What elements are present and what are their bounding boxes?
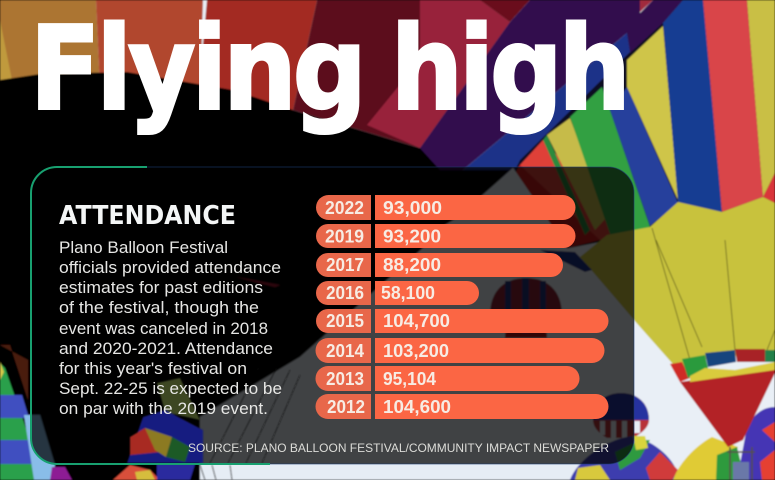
text block: description: officials provided attendance — [59, 259, 281, 277]
bar 2016 — [316, 281, 479, 305]
bar 2019: 93,200 — [383, 226, 441, 246]
text block: description: on par with the 2019 event. — [59, 400, 268, 418]
text block: description: event was canceled in 2018 — [59, 320, 268, 338]
bar 2016: 58,100 — [381, 283, 435, 303]
text block: description: Plano Balloon Festival — [59, 239, 228, 257]
text block: description — [59, 239, 282, 418]
text block: description: for this year's festival on — [59, 360, 247, 378]
source line: SOURCE: PLANO BALLOON FESTIVAL/COMMUNITY IMPACT NEWSPAPER — [188, 441, 609, 455]
heading: attendance: ATTENDANCE — [59, 201, 236, 231]
bar 2019 — [316, 224, 576, 248]
bar 2014: 103,200 — [383, 341, 449, 361]
bar 2022: 93,000 — [383, 198, 442, 218]
bar 2022: 2022 — [325, 198, 364, 218]
bar 2016: 2016 — [326, 283, 364, 303]
text block: description: Sept. 22-25 is expected to be — [59, 380, 282, 398]
bar 2017 — [316, 253, 563, 277]
bar 2017: 88,200 — [383, 255, 441, 275]
bar 2014 — [316, 338, 604, 363]
bar 2013 — [316, 366, 580, 391]
panel border: blue edge — [147, 167, 634, 464]
balloon seen through panel — [127, 365, 300, 480]
bar 2013: 95,104 — [383, 369, 436, 389]
text block: description: of the festival, though the — [59, 299, 259, 317]
bar chart: attendance by year — [316, 195, 608, 419]
title — [30, 2, 627, 136]
title: Flying — [30, 2, 363, 136]
bar 2014: 2014 — [326, 341, 364, 361]
bar 2022 — [316, 195, 575, 220]
text block: description: and 2020-2021. Attendance — [59, 340, 273, 358]
bar 2015 — [316, 309, 608, 333]
bar 2012: 104,600 — [383, 397, 451, 417]
title: high — [391, 2, 627, 136]
bar 2015: 2015 — [326, 311, 364, 331]
bar 2012 — [316, 394, 608, 419]
bar 2015: 104,700 — [383, 311, 450, 331]
panel: attendance — [31, 167, 634, 480]
text block: description: estimates for past editions — [59, 279, 263, 297]
bar 2019: 2019 — [325, 226, 364, 246]
panel background — [31, 167, 634, 464]
bar 2013: 2013 — [326, 369, 364, 389]
panel border: green edge — [31, 167, 270, 464]
bar 2017: 2017 — [326, 255, 364, 275]
bar 2012: 2012 — [327, 397, 365, 417]
